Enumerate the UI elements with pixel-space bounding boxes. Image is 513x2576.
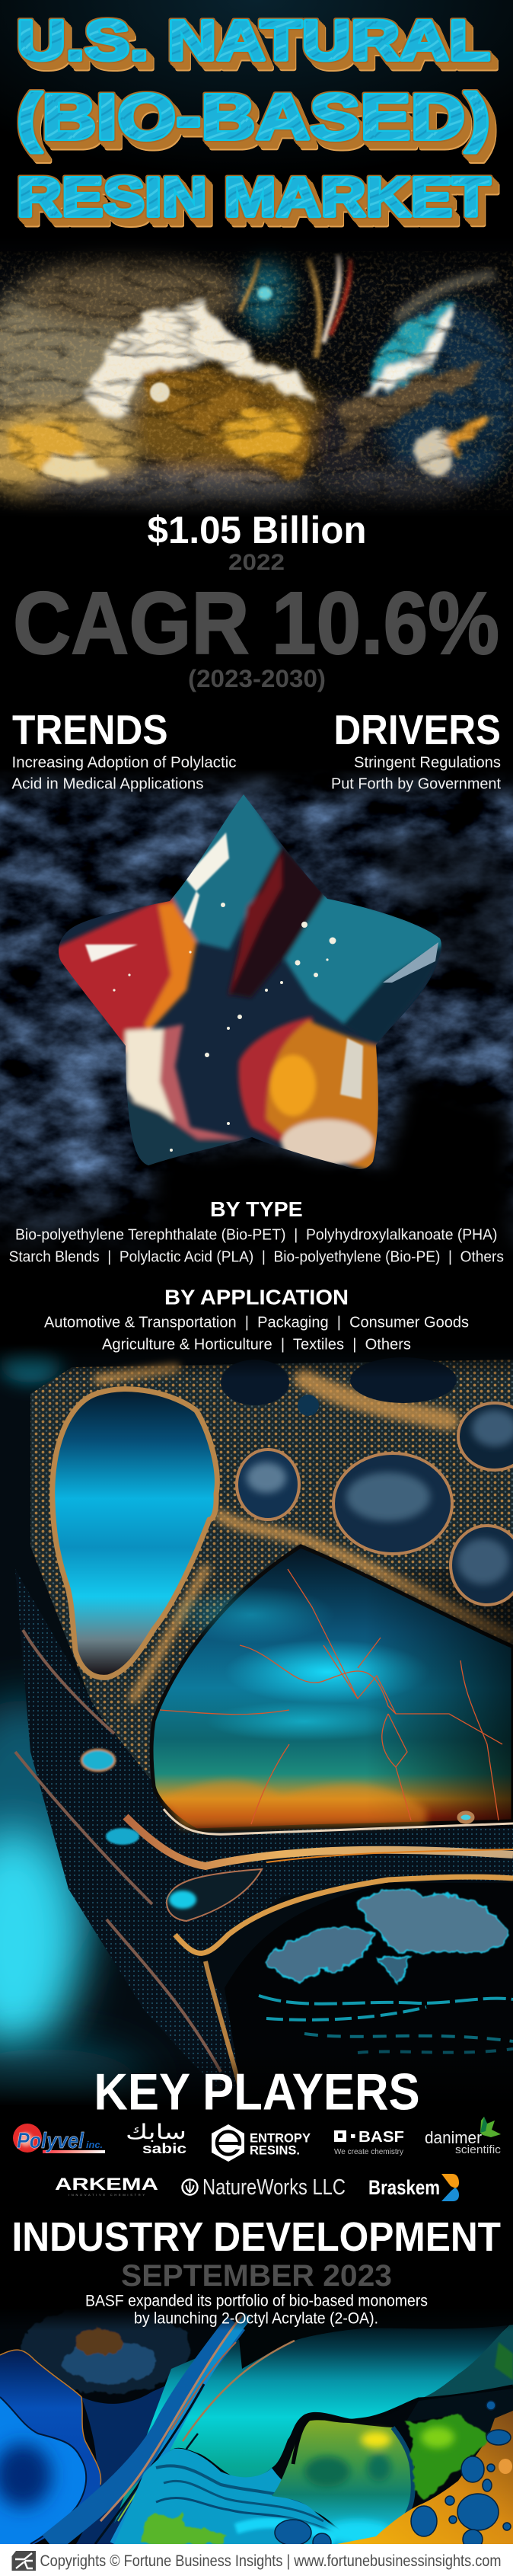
red veins [160, 1569, 502, 1824]
network texture [15, 1360, 513, 2102]
by type: Starch Blends | Polylactic Acid (PLA) | Bio-polyethylene (Bio-PE) | Others [9, 1249, 504, 1266]
amber pool [337, 2411, 513, 2544]
header glow [0, 0, 513, 236]
dark curve [293, 2386, 513, 2464]
logo: Danimer Scientific: scientific [455, 2143, 502, 2156]
cell: large left [53, 1389, 217, 1677]
logo: Danimer Scientific [425, 2117, 502, 2156]
wave stripes [156, 2466, 335, 2540]
logo: BASF: BASF [358, 2129, 404, 2146]
cell: large center [151, 1546, 513, 1830]
dark veins [0, 251, 513, 510]
teal field [114, 2319, 513, 2523]
gold network glow [99, 1367, 513, 1699]
green foliage [406, 2415, 487, 2501]
logo: Entropy Resins: ENTROPY [250, 2131, 311, 2145]
title [17, 9, 490, 229]
black pocket [225, 1883, 513, 2106]
gold bands [15, 1630, 513, 2102]
network cells [221, 1357, 513, 1605]
value figure: $1.05 Billion [148, 509, 367, 551]
body contours [0, 2350, 101, 2544]
star highlights [85, 833, 438, 1152]
logo: SABIC [126, 2121, 186, 2156]
dark top sky [236, 2308, 513, 2369]
development text: BASF expanded its portfolio of bio-based monomers [85, 2293, 428, 2309]
logo: Arkema [55, 2175, 158, 2197]
by application items: Automotive & Transportation | Packaging | Consumer Goods [44, 1315, 469, 1331]
cell glow [164, 1569, 513, 1828]
logo: SABIC: sabic [142, 2141, 186, 2156]
by type [9, 1197, 504, 1266]
logo: BASF [334, 2129, 404, 2156]
value year: 2022 [228, 550, 285, 575]
logo: SABIC: سابك [126, 2121, 186, 2144]
by application heading: BY APPLICATION [164, 1285, 349, 1309]
wave region [114, 2449, 360, 2544]
green pool [272, 2420, 413, 2544]
development text [85, 2293, 428, 2328]
image: resin cells with gold network [0, 1344, 513, 2125]
by type heading: BY TYPE [210, 1197, 303, 1221]
leaf [142, 2511, 227, 2544]
cell light patches [247, 1410, 513, 1584]
resin forms [6, 299, 499, 482]
title line 3: RESIN MARKET [17, 168, 490, 229]
key players heading: KEY PLAYERS [94, 2063, 420, 2121]
foliage highlight [421, 2427, 454, 2448]
logo: Polyvel [13, 2124, 105, 2153]
icon: Fortune Business Insights logo [12, 2551, 36, 2571]
left teal glow [0, 1344, 145, 2125]
amber bubble [499, 2459, 512, 2474]
rocks [20, 2306, 190, 2394]
drivers [331, 706, 501, 793]
drivers text: Stringent Regulations [354, 754, 501, 771]
pool colour patches [304, 2431, 392, 2545]
development date: SEPTEMBER 2023 [121, 2259, 392, 2293]
logo: NatureWorks: NatureWorks LLC [202, 2175, 346, 2200]
logos [13, 2117, 502, 2201]
image: marbled gold and white resin [0, 236, 513, 518]
streak band [49, 2316, 295, 2544]
logo: Polyvel: Polyvel [17, 2129, 84, 2153]
cyan ripples [259, 1996, 513, 2053]
trends: Acid in Medical Applications [12, 776, 204, 793]
by application [44, 1285, 469, 1354]
CAGR stat [13, 574, 499, 692]
by type items: Bio-polyethylene Terephthalate (Bio-PET) | Polyhydroxylalkanoate (PHA) [15, 1227, 498, 1244]
logo: Entropy Resins: RESINS. [250, 2143, 300, 2157]
upper right leaves [495, 2342, 513, 2380]
logo: Danimer Scientific: danimer [425, 2128, 482, 2147]
top right bubbles [406, 2389, 513, 2441]
market value [148, 509, 367, 575]
blue body shade [0, 2443, 52, 2507]
footer [0, 2544, 513, 2576]
trends [12, 706, 237, 793]
image: galaxy resin star on dark cloth [0, 769, 513, 1257]
dark right wedge [419, 2322, 513, 2399]
bubbles [275, 2401, 511, 2552]
droplet cells [81, 1750, 473, 1921]
title line 1: U.S. NATURAL [17, 9, 490, 72]
wedge [76, 2386, 165, 2544]
gold speckle texture [0, 251, 513, 510]
title line 2: (BIO-BASED) [17, 81, 490, 152]
blue lumps [266, 1889, 508, 1984]
blue body [0, 2350, 101, 2544]
logo: Polyvel: inc. [86, 2140, 103, 2150]
image: teal blue and green fluid art [0, 2306, 513, 2552]
logo: Arkema: ARKEMA [55, 2175, 158, 2194]
resin streaks [150, 255, 495, 402]
logo: Arkema: INNOVATIVE CHEMISTRY [69, 2193, 145, 2197]
star [58, 794, 441, 1169]
logo: BASF: We create chemistry [334, 2147, 404, 2156]
logo: Entropy Resins [212, 2124, 311, 2162]
logo: Braskem: Braskem [368, 2176, 440, 2199]
CAGR period: (2023-2030) [188, 665, 326, 692]
by application: Agriculture & Horticulture | Textiles | Others [102, 1337, 411, 1354]
trends heading: TRENDS [12, 706, 167, 753]
drivers: Put Forth by Government [331, 776, 501, 793]
development text: by launching 2-Octyl Acrylate (2-OA). [134, 2310, 378, 2328]
soft colour field [0, 255, 513, 513]
trends text: Increasing Adoption of Polylactic [12, 754, 237, 771]
bright blue body [0, 2397, 86, 2544]
